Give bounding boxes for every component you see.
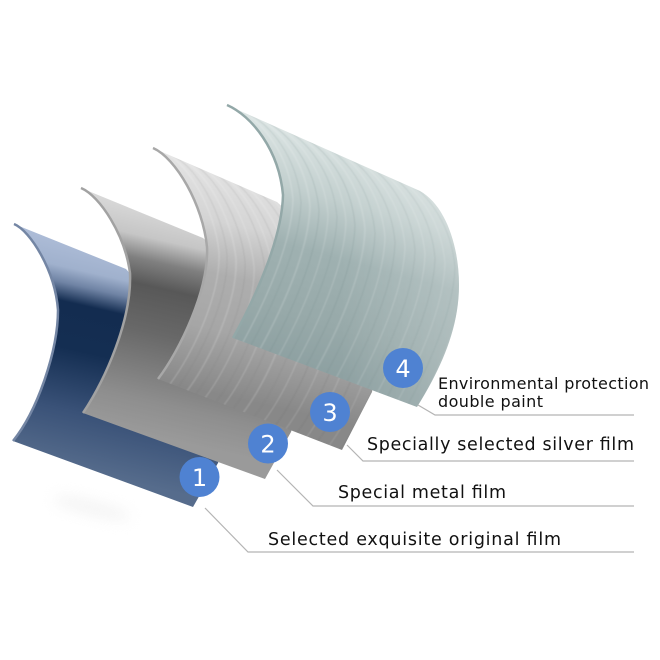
label 2: Special metal film	[338, 483, 506, 503]
faint ground shadow	[51, 492, 133, 524]
label 4: Environmental protection	[438, 374, 649, 393]
badge 4: 4	[395, 355, 411, 383]
leader line 3	[347, 445, 634, 461]
badge 3: 3	[322, 399, 338, 427]
badge 1: 1	[192, 464, 207, 492]
leader line 4	[418, 405, 634, 415]
label 3: Specially selected silver film	[367, 435, 634, 455]
label 1: Selected exquisite original film	[268, 530, 561, 550]
label 4: double paint	[438, 392, 543, 411]
sheet 1: selected exquisite original film	[13, 224, 240, 507]
badge 2	[248, 424, 288, 464]
badge 3	[310, 392, 350, 432]
badge 4	[383, 348, 423, 388]
label 4	[438, 374, 649, 411]
leader line 1	[205, 508, 634, 552]
sheet 4: environmental protection double paint	[227, 105, 465, 415]
badge 2: 2	[260, 430, 276, 458]
badge 1	[180, 457, 220, 497]
sheet 3: specially selected silver film	[152, 147, 372, 450]
sheet 2: special metal film	[81, 188, 320, 479]
leader line 2	[277, 470, 634, 506]
